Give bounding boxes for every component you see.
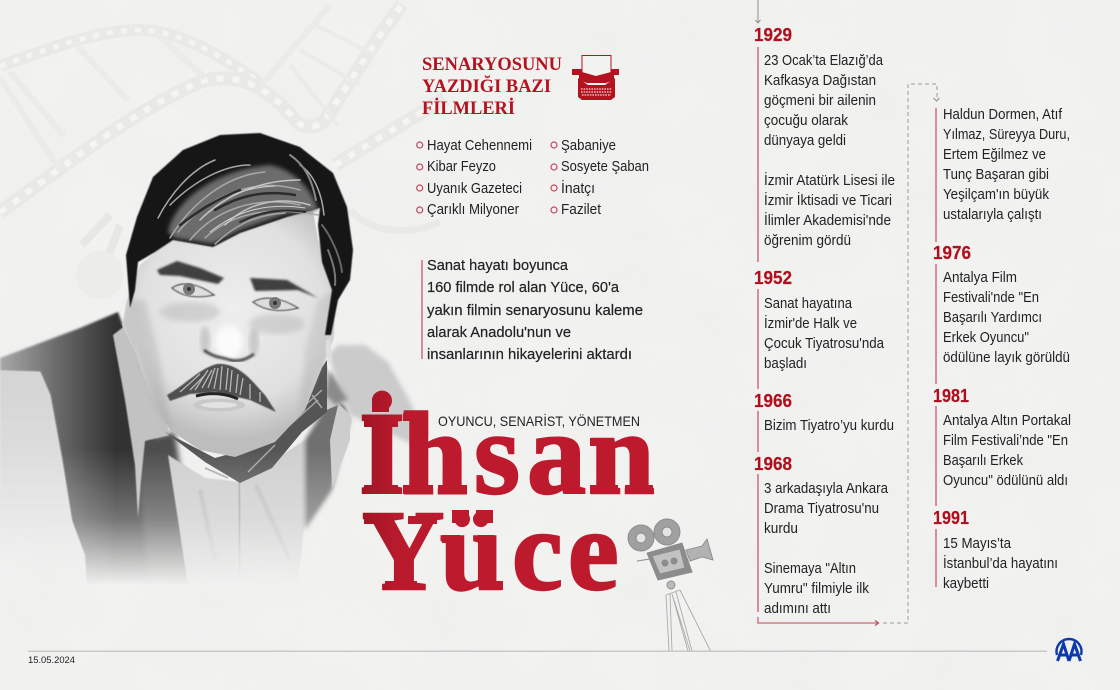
entry: masters of Yeşilçam: Ertem Eğilmez ve [943, 147, 1046, 163]
heading: films he wrote: SENARYOSUNU [422, 54, 562, 75]
entry 1968: 3 arkadaşıyla Ankara [764, 481, 889, 497]
entry 1968: Sinemaya "Altın [764, 561, 856, 577]
entry 1981: 1981 [933, 385, 969, 406]
film list: Kibar Feyzo [427, 159, 496, 175]
entry 1991 [933, 507, 1058, 592]
intro paragraph: yakın filmin senaryosunu kaleme [427, 303, 643, 319]
face [122, 205, 336, 457]
intro paragraph: 160 filmde rol alan Yüce, 60'a [427, 280, 620, 296]
entry 1981: Antalya Altın Portakal [943, 413, 1071, 429]
entry 1952: başladı [764, 356, 807, 372]
heading: films he wrote [422, 54, 562, 119]
entry 1966: Bizim Tiyatro’yu kurdu [764, 418, 894, 434]
subtitle: OYUNCU, SENARİST, YÖNETMEN [438, 412, 640, 429]
entry 1991: 1991 [933, 507, 969, 528]
entry 1929: 1929 [754, 24, 792, 45]
date: 15.05.2024 [28, 655, 75, 665]
entry 1991: İstanbul’da hayatını [943, 554, 1058, 572]
entry 1968: Yumru" filmiyle ilk [764, 581, 870, 597]
timeline [754, 0, 1071, 626]
film list: Uyanık Gazeteci [427, 181, 522, 197]
film list: Şabaniye [561, 138, 616, 154]
entry 1968: kurdu [764, 521, 798, 537]
background film strips [0, 4, 445, 299]
entry 1952: İzmir'de Halk ve [764, 314, 857, 332]
entry 1929: İlimler Akademisi'nde [764, 211, 891, 229]
timeline rules [757, 47, 937, 612]
hair [126, 133, 353, 335]
heading: films he wrote: FİLMLERİ [422, 98, 515, 119]
icon: film camera on tripod [628, 519, 713, 652]
entry 1929: Kafkasya Dağıstan [764, 73, 876, 89]
entry 1991: 15 Mayıs’ta [943, 536, 1012, 552]
mouth [196, 394, 238, 399]
entry: masters of Yeşilçam [943, 107, 1070, 223]
entry 1929: göçmeni bir ailenin [764, 93, 876, 109]
moustache [167, 364, 276, 412]
ears [124, 308, 138, 352]
title: name: Yüce [362, 487, 619, 614]
entry: masters of Yeşilçam: Yılmaz, Süreyya Duru, [943, 127, 1070, 143]
entry 1976: 1976 [933, 242, 971, 263]
film list: İnatçı [561, 179, 595, 197]
nose [215, 325, 243, 359]
entry 1981 [933, 385, 1071, 489]
entry: masters of Yeşilçam: Haldun Dormen, Atıf [943, 107, 1063, 123]
eyes [172, 284, 214, 297]
title: name [359, 388, 655, 614]
entry 1929 [754, 24, 895, 249]
entry 1929: çocuğu olarak [764, 113, 849, 129]
entry 1966: 1966 [754, 390, 792, 411]
arrow: timeline start [756, 0, 760, 23]
title: name: İhsan [359, 388, 655, 519]
intro paragraph: insanlarının hikayelerini aktardı [427, 347, 632, 363]
footer rule [28, 650, 1047, 652]
intro paragraph: Sanat hayatı boyunca [427, 258, 569, 274]
entry 1929: öğrenim gördü [764, 233, 851, 249]
entry 1929: İzmir İktisadi ve Ticari [764, 191, 892, 209]
entry 1968: adımını attı [764, 601, 831, 617]
entry 1976: ödülüne layık görüldü [943, 350, 1070, 366]
entry 1968: Drama Tiyatrosu'nu [764, 501, 879, 517]
entry 1966 [754, 390, 894, 434]
icon: Anadolu Agency logo [1056, 639, 1082, 661]
entry 1976: Erkek Oyuncu" [943, 330, 1029, 346]
entry 1968: 1968 [754, 453, 792, 474]
entry 1991: kaybetti [943, 576, 989, 592]
film list: Hayat Cehennemi [427, 138, 532, 154]
entry 1952: Çocuk Tiyatrosu'nda [764, 336, 885, 352]
under-eye shading [160, 302, 220, 322]
intro paragraph: alarak Anadolu'nun ve [427, 325, 571, 341]
heading: films he wrote: YAZDIĞI BAZI [422, 75, 551, 97]
portrait photo: İhsan Yüce [0, 133, 425, 600]
entry 1976: Antalya Film [943, 270, 1017, 286]
entry 1952 [754, 267, 885, 372]
entry: masters of Yeşilçam: ustalarıyla çalıştı [943, 207, 1042, 223]
entry 1929: dünyaya geldi [764, 133, 846, 149]
entry 1952: 1952 [754, 267, 792, 288]
clothing: vest, shirt and collar [0, 312, 425, 600]
entry 1968 [754, 453, 889, 617]
entry: masters of Yeşilçam: Tunç Başaran gibi [943, 167, 1049, 183]
eyebrows [157, 261, 224, 284]
film list: Fazilet [561, 202, 601, 218]
slab serifs [364, 399, 653, 590]
entry: masters of Yeşilçam: Yeşilçam'ın büyük [943, 187, 1050, 203]
film list [417, 138, 649, 218]
arrow: column link [758, 84, 940, 626]
entry 1929: İzmir Atatürk Lisesi ile [764, 171, 895, 189]
entry 1981: Oyuncu" ödülünü aldı [943, 473, 1068, 489]
film list: Sosyete Şaban [561, 159, 649, 175]
entry 1976 [933, 242, 1070, 366]
entry 1952: Sanat hayatına [764, 296, 853, 312]
intro paragraph [421, 258, 643, 363]
entry 1929: 23 Ocak’ta Elazığ’da [764, 53, 884, 69]
entry 1976: Başarılı Yardımcı [943, 310, 1042, 326]
icon: typewriter [572, 56, 619, 100]
entry 1981: Film Festivali’nde "En [943, 433, 1068, 449]
entry 1976: Festivali'nde "En [943, 290, 1039, 306]
entry 1981: Başarılı Erkek [943, 453, 1024, 469]
film list: Çarıklı Milyoner [427, 202, 519, 218]
